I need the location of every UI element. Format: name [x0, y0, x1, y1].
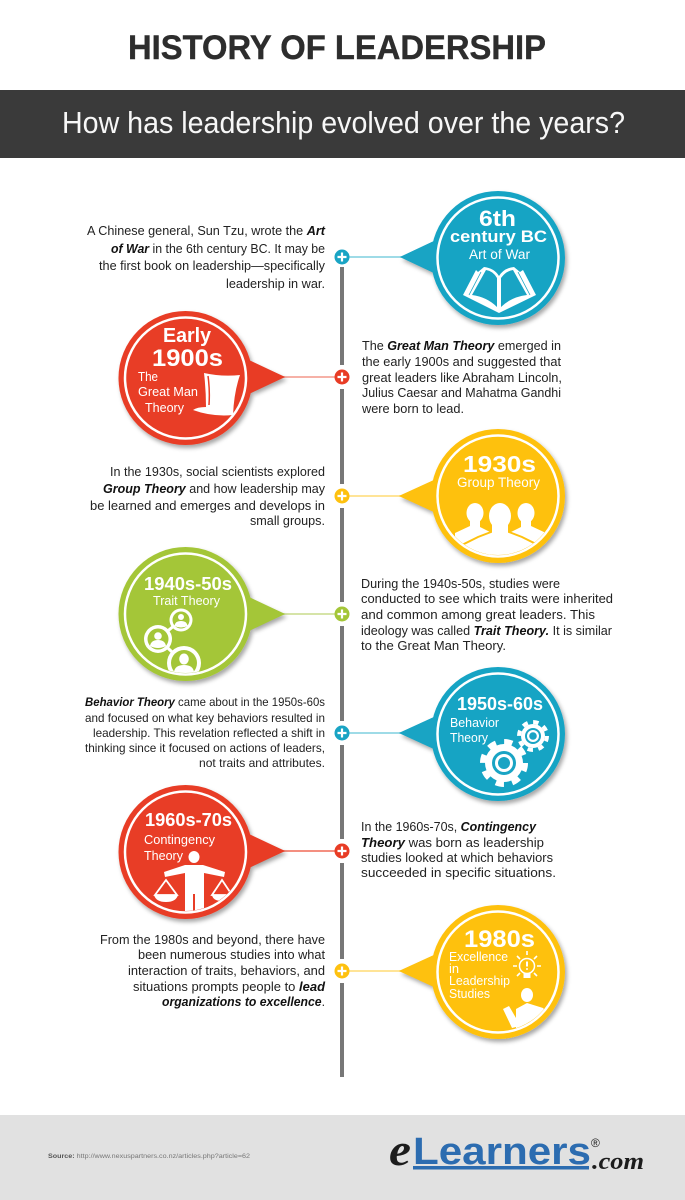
text: Behavior Theory: leadership. This revelation reflected a shift in [93, 726, 325, 740]
text: Behavior Theory: and focused on what key behaviors resulted in [85, 711, 325, 725]
text: Group Theory: In the 1930s, social scientists explored [110, 465, 325, 479]
icon: lightbulb [513, 951, 541, 978]
bubble: Contingency [144, 832, 215, 847]
text: Excellence: interaction of traits, behaviors, and [128, 964, 325, 978]
bubble: 1900s [152, 345, 223, 372]
bubble: in [449, 961, 459, 976]
connector line [342, 732, 402, 734]
text: Great Man Theory [361, 339, 562, 416]
text: Trait Theory: and common among great leaders. This [361, 608, 595, 622]
text: Behavior Theory: Behavior Theory came about in the 1950s-60s [85, 695, 325, 709]
bubble [400, 191, 565, 325]
logo: eLearners.com: Learners [413, 1131, 591, 1173]
connector line [283, 376, 342, 378]
text: Art of War [87, 224, 326, 291]
connector line [342, 970, 402, 972]
text: Group Theory: be learned and emerges and develops in [90, 499, 325, 513]
bubble [118, 785, 285, 919]
icon: man with scales [154, 851, 232, 912]
text: Group Theory: Group Theory and how leadership may [103, 482, 326, 496]
subtitle banner [0, 90, 685, 158]
bubble: The [138, 369, 158, 384]
bubble [118, 547, 285, 681]
icon: open book [463, 267, 536, 313]
timeline item: Early 1900s [118, 311, 350, 445]
icon: connected people [144, 608, 201, 680]
bubble: Group Theory [457, 475, 540, 490]
text: Great Man Theory: Julius Caesar and Mahatma Gandhi [362, 386, 561, 400]
timeline item: 1960s-70s [118, 785, 350, 919]
bubble: Early [163, 325, 212, 347]
bubble: 6th [479, 206, 516, 231]
plus marker [334, 370, 350, 384]
plus marker [334, 844, 350, 858]
text: Art of War: the first book on leadership—specifically [99, 259, 326, 273]
text: Great Man Theory: great leaders like Abraham Lincoln, [362, 371, 562, 385]
bubble: 1960s-70s [145, 809, 232, 830]
text: Contingency Theory: studies looked at which behaviors [361, 851, 553, 865]
text: Art of War: of War in the 6th century BC. It may be [111, 242, 325, 256]
bubble: Great Man [138, 384, 198, 399]
text: Contingency Theory: Theory was born as leadership [361, 836, 544, 850]
text: Trait Theory: ideology was called Trait Theory. It is similar [361, 624, 612, 638]
timeline spine [340, 265, 344, 1077]
text: Contingency Theory: In the 1960s-70s, Contingency [361, 820, 537, 834]
text: Behavior Theory: not traits and attributes. [199, 756, 325, 770]
icon: three people [455, 503, 544, 555]
text: Trait Theory: conducted to see which traits were inherited [361, 592, 613, 606]
logo: eLearners.com: .com [592, 1149, 644, 1175]
text: Behavior Theory [85, 695, 325, 770]
text: Great Man Theory: were born to lead. [361, 402, 464, 416]
bubble: Leadership [449, 973, 510, 988]
bubble: 1940s-50s [144, 573, 232, 594]
connector line [342, 256, 402, 258]
bubble: Behavior [450, 715, 500, 730]
plus marker [334, 964, 350, 978]
connector line [283, 613, 342, 615]
text: Art of War: A Chinese general, Sun Tzu, wrote the Art [87, 224, 326, 238]
bubble [399, 905, 565, 1040]
subtitle banner: How has leadership evolved over the years? [62, 106, 625, 140]
bubble [118, 311, 285, 445]
bubble: Trait Theory [153, 593, 220, 608]
icon: gears [483, 722, 547, 784]
source: Source: http://www.nexuspartners.co.nz/articles.php?article=62 [48, 1153, 250, 1160]
bubble: Theory [450, 730, 488, 745]
text: Trait Theory [361, 577, 613, 653]
text: Contingency Theory [361, 820, 556, 880]
bubble: Studies [449, 986, 490, 1001]
logo: eLearners.com: ® [591, 1136, 600, 1150]
text: Excellence: From the 1980s and beyond, there have [100, 933, 325, 947]
plus marker [334, 726, 350, 740]
text: Great Man Theory: The Great Man Theory emerged in [362, 339, 561, 353]
bubble: Theory [144, 848, 183, 863]
timeline item: 1930s [334, 429, 565, 565]
connector line [283, 850, 342, 852]
bubble [399, 429, 565, 565]
text: Excellence: organizations to excellence. [162, 995, 325, 1009]
text: Trait Theory: to the Great Man Theory. [361, 639, 506, 653]
logo: eLearners.com: e [389, 1124, 411, 1175]
bubble: 1980s [464, 926, 535, 953]
bubble [399, 667, 565, 801]
text: Behavior Theory: thinking since it focused on actions of leaders, [85, 741, 325, 755]
text: Excellence: situations prompts people to lead [133, 980, 325, 994]
bubble: 1950s-60s [457, 693, 543, 714]
text: Group Theory [90, 465, 326, 528]
plus marker [334, 250, 350, 264]
logo: eLearners.com [389, 1124, 644, 1175]
text: Great Man Theory: the early 1900s and suggested that [362, 355, 562, 369]
text: Contingency Theory: succeeded in specific situations. [361, 866, 556, 880]
timeline item: 1980s [334, 905, 565, 1040]
text: Excellence: been numerous studies into what [138, 948, 326, 962]
plus marker [334, 606, 350, 622]
text: Excellence [100, 933, 326, 1009]
plus marker [334, 488, 350, 504]
title: HISTORY OF LEADERSHIP [128, 29, 546, 67]
bubble: century BC [450, 227, 547, 246]
connector line [342, 495, 402, 497]
bubble: 1930s [463, 451, 536, 477]
icon: man [503, 988, 544, 1028]
timeline item: 1950s-60s [334, 667, 565, 801]
timeline item: 1940s-50s [118, 547, 350, 681]
footer [0, 1115, 685, 1200]
icon: top hat [193, 373, 240, 415]
timeline item: 6th century BC [334, 191, 565, 325]
bubble: Art of War [469, 247, 531, 262]
text: Group Theory: small groups. [250, 514, 325, 528]
text: Trait Theory: During the 1940s-50s, studies were [361, 577, 560, 591]
text: Art of War: leadership in war. [226, 277, 325, 291]
bubble: Excellence [449, 949, 508, 964]
bubble: Theory [145, 400, 184, 415]
